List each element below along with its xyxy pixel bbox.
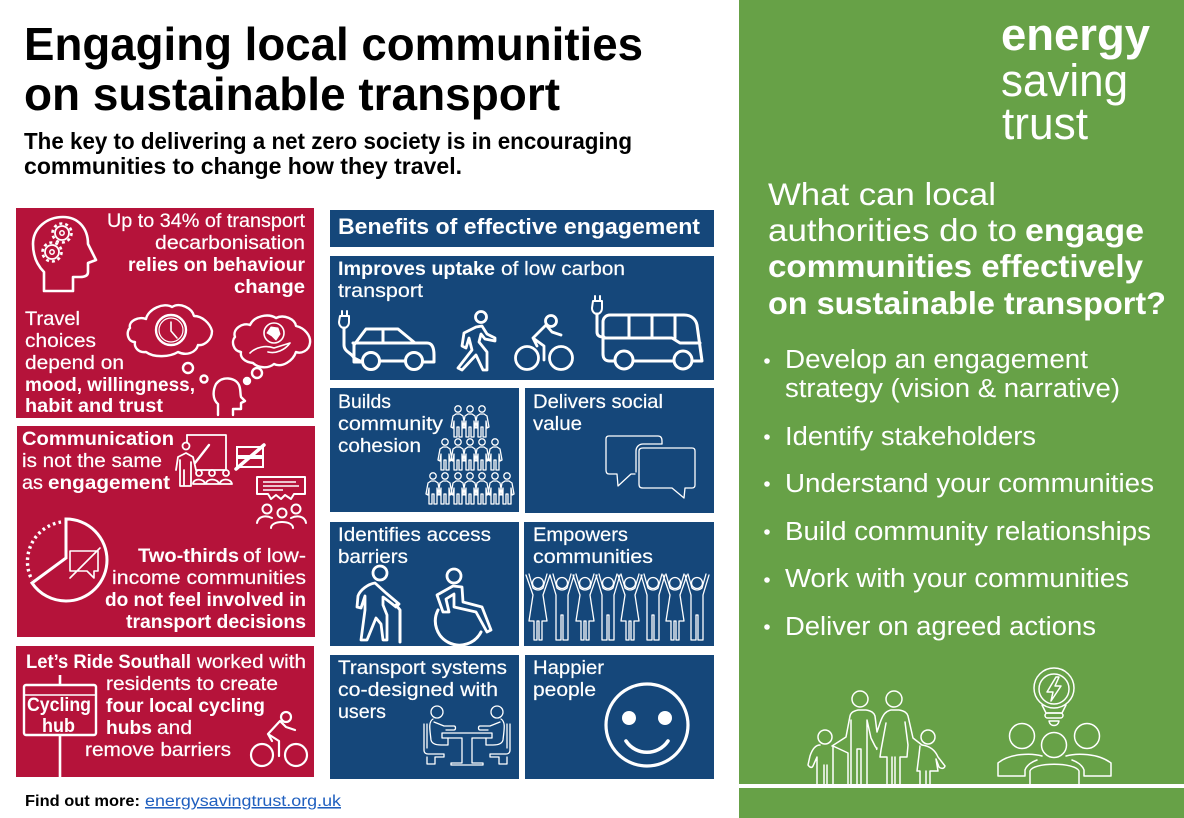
icon: family holding hands — [808, 691, 945, 784]
travel choices text — [25, 308, 195, 417]
two-thirds text: do not feel involved in — [105, 589, 306, 611]
baseline strip — [739, 784, 1184, 788]
panel: Let's Ride Southall — [16, 646, 314, 777]
cohesion text: community — [338, 413, 443, 435]
icon: smiley face — [606, 684, 688, 766]
co-designed text: users — [338, 701, 386, 723]
panel: empowers communities — [524, 522, 714, 646]
statistic text: Up to 34% of transport — [107, 210, 306, 232]
icon: speech bubbles — [606, 436, 695, 498]
case study text: Let’s Ride Southall — [26, 651, 191, 673]
uptake text — [338, 258, 625, 302]
empowers text: communities — [533, 546, 653, 568]
icon: head with gears — [33, 217, 96, 291]
panel: communication vs engagement — [17, 426, 315, 637]
heading: benefits: Benefits of effective engagement — [338, 214, 701, 239]
bullet list of actions: Identify stakeholders — [785, 423, 1036, 451]
heading: what can local authorities do — [768, 176, 1166, 321]
two-thirds text: Two-thirds — [138, 545, 239, 567]
happier text: people — [533, 679, 596, 701]
communication text: as — [22, 472, 43, 494]
co-designed text: co-designed with — [338, 679, 498, 701]
bullet list of actions: Deliver on agreed actions — [785, 613, 1096, 641]
case study text: residents to create — [106, 673, 278, 695]
communication text — [22, 428, 174, 494]
icon: cycling hub sign — [24, 675, 96, 777]
two-thirds text: of low- — [243, 545, 306, 567]
icon: cycling hub sign: hub — [42, 715, 75, 737]
icon: presenter and audience — [176, 435, 232, 486]
heading: what can local authorities do: engage — [1025, 212, 1144, 248]
icon: elderly person with cane — [357, 566, 400, 642]
find out more link: Find out more: — [25, 793, 140, 810]
icon: speech box with people — [257, 477, 306, 528]
panel: green sidebar — [739, 0, 1184, 818]
travel choices text: Travel — [25, 308, 80, 330]
icon: walker — [458, 312, 495, 370]
find out more link: energysavingtrust.org.uk — [145, 793, 341, 810]
bullet list of actions — [764, 346, 1154, 641]
travel choices text: depend on — [25, 352, 124, 374]
co-designed text: Transport systems — [338, 657, 507, 679]
logo: energy saving trust: saving — [1001, 55, 1128, 106]
two-thirds text: income communities — [112, 567, 306, 589]
icon: cyclist — [251, 712, 307, 766]
logo: energy saving trust: energy — [1001, 9, 1150, 60]
happier text: Happier — [533, 657, 605, 679]
heading: benefits — [330, 210, 714, 247]
panel: behaviour change — [16, 208, 314, 418]
cohesion text — [338, 391, 443, 457]
heading: what can local authorities do: on sustainable transport? — [768, 285, 1166, 321]
empowers text: Empowers — [533, 524, 628, 546]
icon: raised-arms crowd — [526, 574, 709, 640]
case study text: remove barriers — [85, 739, 231, 761]
icon: two people at table — [424, 706, 510, 765]
barriers text — [338, 524, 491, 568]
statistic text: relies on behaviour — [128, 254, 305, 276]
empowers text — [533, 524, 653, 568]
case study text: worked with — [196, 651, 306, 673]
icon: wheelchair user — [435, 569, 491, 645]
icon: electric car — [339, 311, 434, 370]
heading: what can local authorities do: What can local — [768, 176, 996, 212]
bullet list of actions: Develop an engagement — [785, 346, 1088, 374]
statistic text: decarbonisation — [155, 232, 305, 254]
case study text: four local cycling — [106, 695, 265, 717]
logo: energy saving trust: trust — [1002, 98, 1088, 149]
case study text: and — [157, 717, 192, 739]
social value text: value — [533, 413, 582, 435]
logo: energy saving trust — [1001, 9, 1150, 149]
bullet list of actions: Understand your communities — [785, 470, 1154, 498]
icon: cyclist — [516, 316, 572, 370]
case study text: hubs — [106, 717, 152, 739]
subtitle: The key to delivering a net zero society is in encouraging — [24, 128, 632, 154]
bullet list of actions: strategy (vision & narrative) — [785, 375, 1120, 403]
icon: crossed-out text box — [236, 445, 264, 469]
uptake text: Improves uptake — [338, 258, 495, 280]
icon: people with lightbulb — [998, 668, 1111, 784]
bullet list of actions: Work with your communities — [785, 565, 1129, 593]
two-thirds text: transport decisions — [126, 611, 306, 633]
title: Engaging local communities — [24, 18, 643, 70]
communication text: Communication — [22, 428, 174, 450]
travel choices text: choices — [25, 330, 96, 352]
social value text: Delivers social — [533, 391, 663, 413]
social value text — [533, 391, 663, 435]
icon: pie chart two-thirds — [27, 519, 107, 601]
two-thirds text — [105, 545, 306, 633]
cohesion text: Builds — [338, 391, 391, 413]
panel: co-designed — [330, 655, 519, 779]
happier text — [533, 657, 605, 701]
subtitle — [24, 128, 632, 179]
panel: community cohesion — [330, 388, 519, 512]
cohesion text: cohesion — [338, 435, 421, 457]
panel: improves uptake — [330, 256, 714, 380]
subtitle: communities to change how they travel. — [24, 153, 462, 179]
communication text: engagement — [48, 472, 171, 494]
barriers text: barriers — [338, 546, 408, 568]
panel: social value — [525, 388, 714, 513]
travel choices text: habit and trust — [25, 395, 164, 417]
case study text — [26, 651, 306, 761]
icon: electric bus — [592, 296, 702, 369]
uptake text: transport — [338, 280, 424, 302]
barriers text: Identifies access — [338, 524, 491, 546]
uptake text: of low carbon — [501, 258, 625, 280]
bullet list of actions: Build community relationships — [785, 518, 1151, 546]
title: on sustainable transport — [24, 68, 560, 120]
co-designed text — [338, 657, 507, 723]
panel: happier people — [525, 655, 714, 779]
heading: what can local authorities do: authorities do to — [768, 212, 1017, 248]
statistic text — [107, 210, 306, 298]
icon: crowd pyramid — [426, 406, 514, 504]
icon: thought clouds with clock, globe and head — [128, 305, 310, 415]
icon: cycling hub sign: Cycling — [27, 694, 91, 716]
statistic text: change — [234, 276, 305, 298]
travel choices text: mood, willingness, — [25, 374, 195, 396]
title — [24, 18, 643, 120]
panel: access barriers — [330, 522, 519, 646]
communication text: is not the same — [22, 450, 162, 472]
heading: what can local authorities do: communities effectively — [768, 248, 1143, 284]
find out more link — [25, 793, 341, 810]
